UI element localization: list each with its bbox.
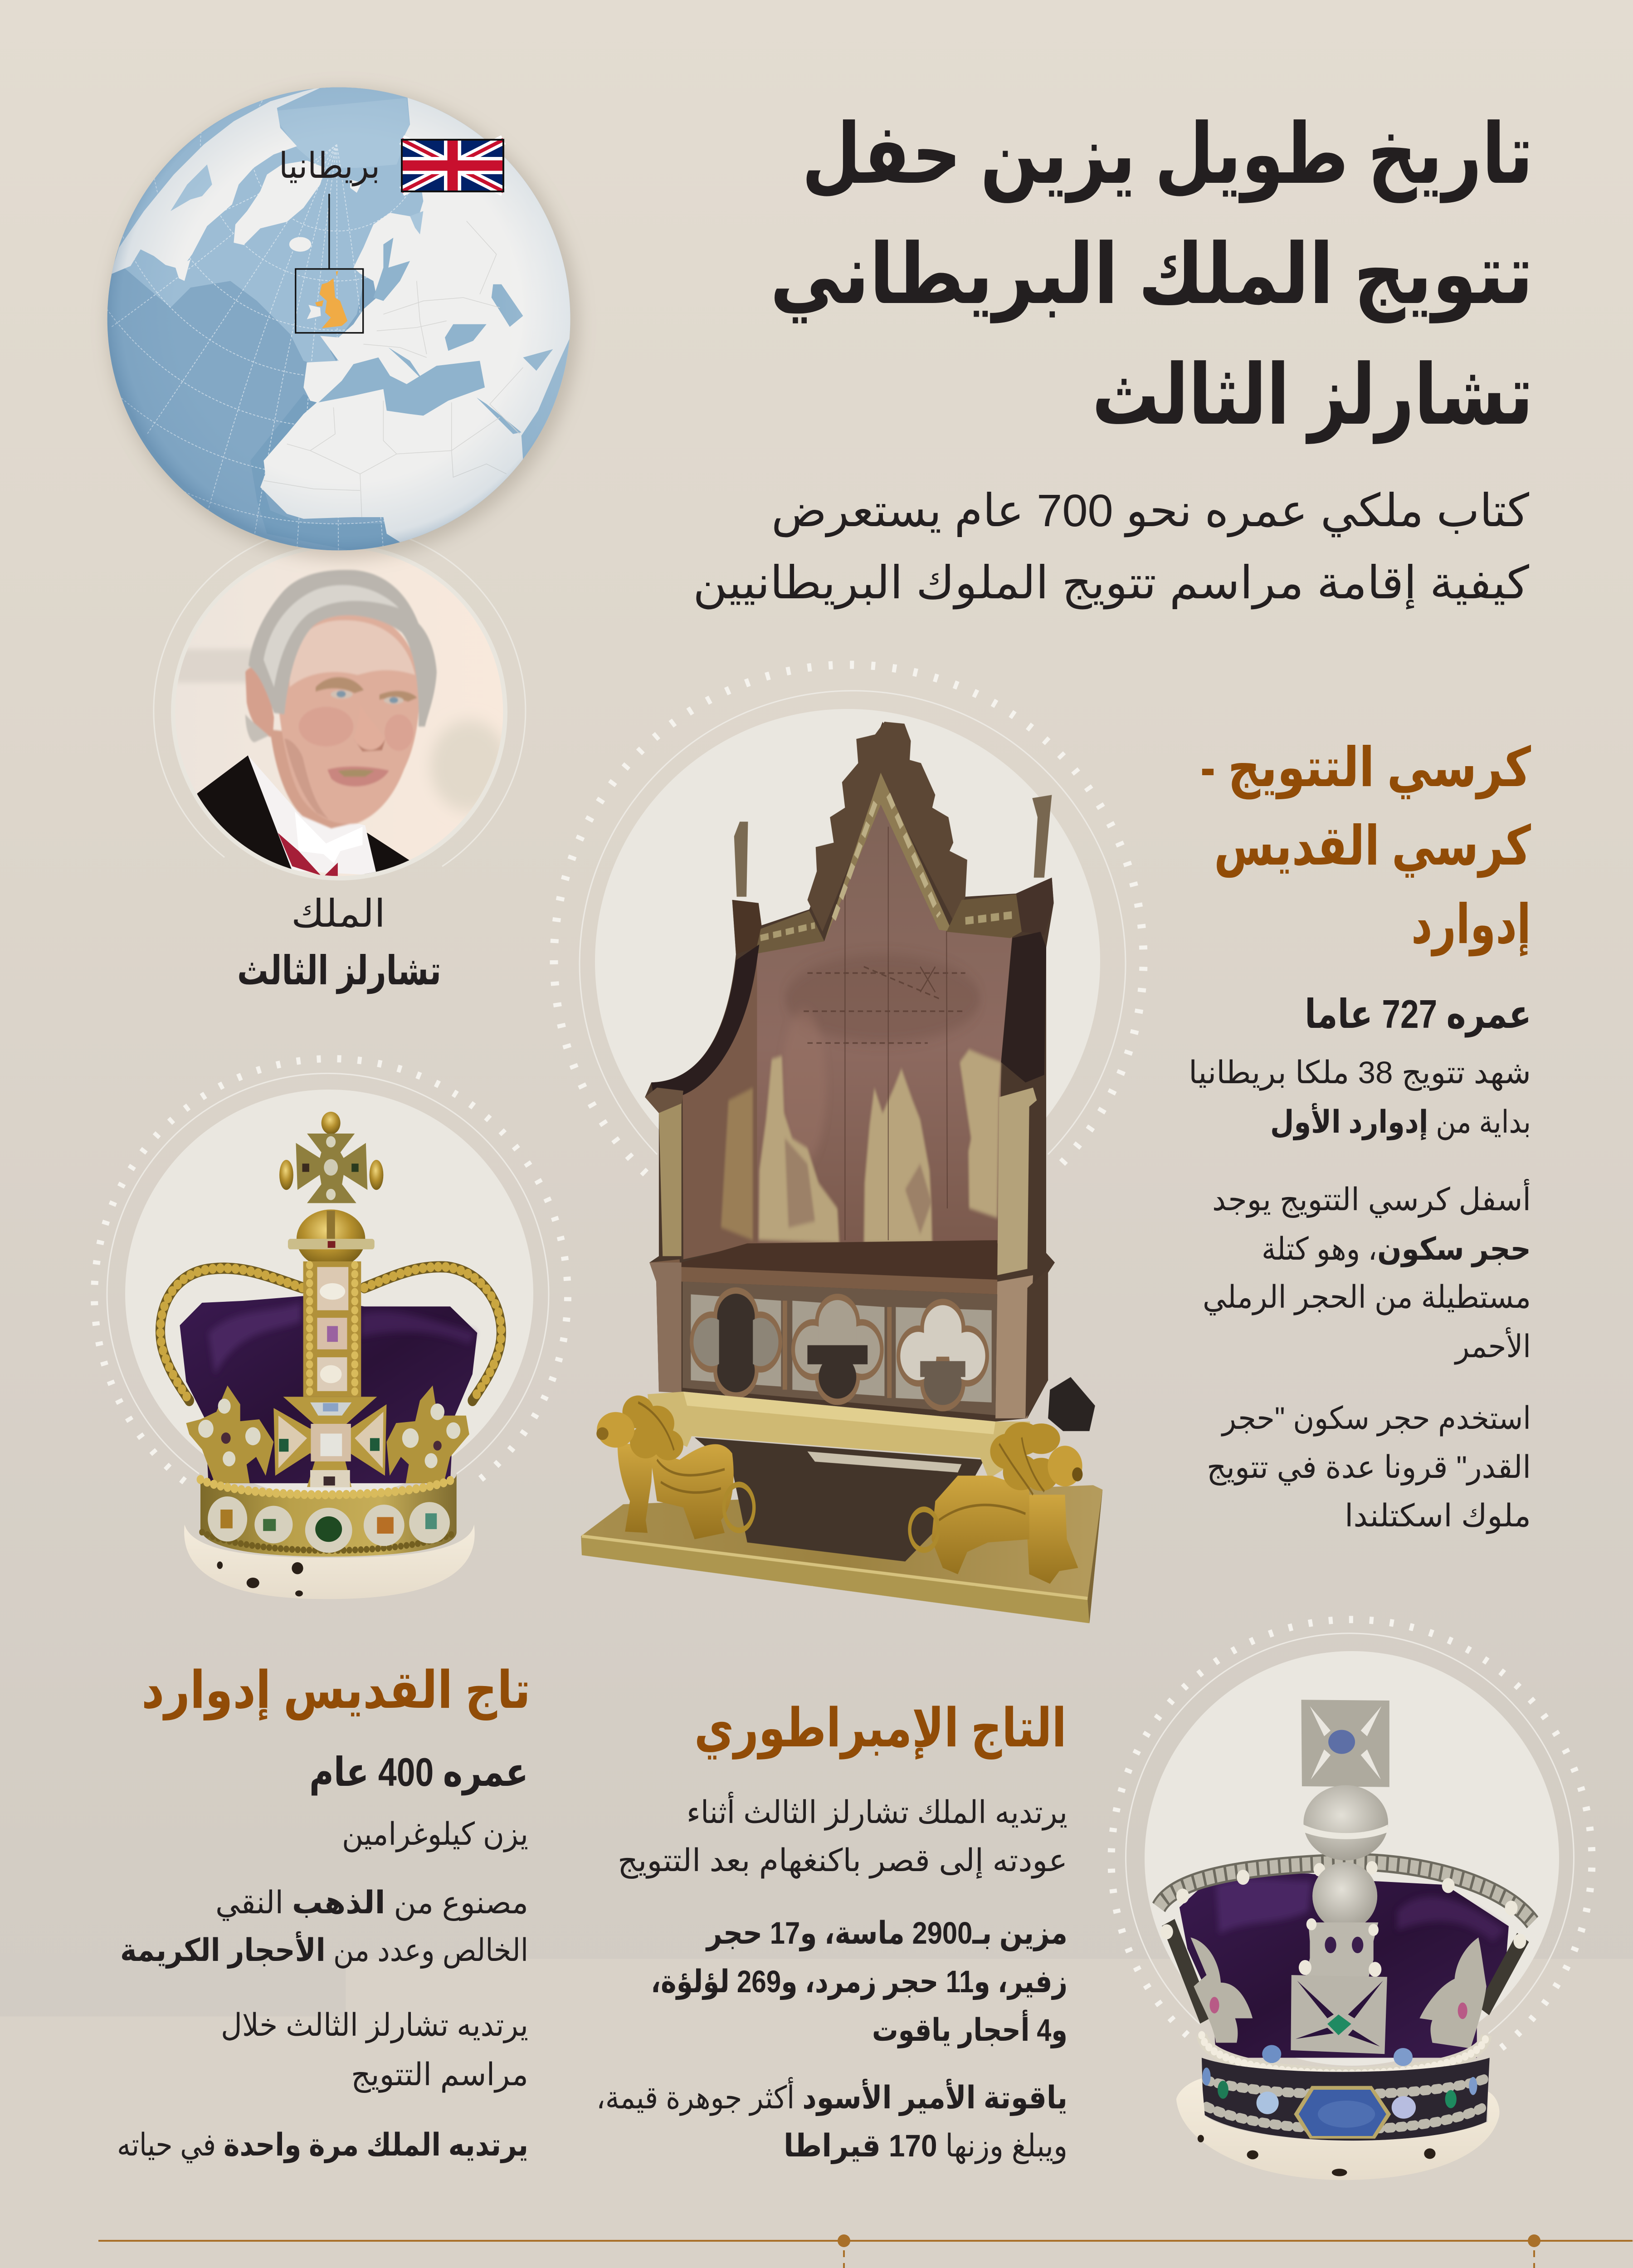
ermine — [1176, 2078, 1500, 2180]
velvet cap — [1180, 1873, 1509, 2058]
locator box and leader — [296, 194, 363, 333]
title — [770, 107, 1533, 444]
heading and text: Imperial State Crown: ويبلغ وزنها 170 قيراطا — [784, 2128, 1068, 2164]
gems — [208, 1496, 450, 1553]
front arch — [1312, 1862, 1377, 1930]
quatrefoils — [693, 1294, 985, 1405]
chair silhouette underlay — [645, 722, 1055, 1422]
heading and text: Coronation Chair: ملوك اسكتلندا — [1345, 1498, 1531, 1534]
photo: King Charles III portrait — [154, 525, 526, 885]
plinth top and front — [581, 1485, 1102, 1623]
heading and text: St Edward's Crown: عمره 400 عام — [309, 1750, 528, 1796]
lion left — [618, 1444, 734, 1539]
heading and text: St Edward's Crown: مراسم التتويج — [351, 2057, 528, 2093]
heading and text: Imperial State Crown: ياقوتة الأمير الأسود أكثر جوهرة قيمة، — [596, 2077, 1068, 2116]
velvet cap — [180, 1296, 477, 1483]
subtitle: كيفية إقامة مراسم تتويج الملوك البريطانيين — [693, 557, 1529, 610]
heading and text: Coronation Chair: القدر" قرونا عدة في تتويج — [1207, 1450, 1531, 1486]
heading and text: St Edward's Crown: الخالص وعدد من الأحجار الكريمة — [120, 1931, 528, 1969]
heading and text: St Edward's Crown: مصنوع من الذهب النقي — [215, 1885, 528, 1921]
ring: Imperial State Crown backdrop — [1111, 1619, 1592, 2066]
heading and text: Coronation Chair: شهد تتويج 38 ملكا بريطانيا — [1189, 1055, 1531, 1091]
photo: Imperial State Crown — [1159, 1700, 1532, 2180]
heading and text: St Edward's Crown: يرتديه تشارلز الثالث خلال — [221, 2008, 528, 2043]
tracery panel — [682, 1281, 997, 1415]
armrest wings — [651, 944, 759, 1095]
chair back panel — [755, 801, 1012, 1243]
title: تشارلز الثالث — [1092, 348, 1533, 444]
heading and text: St Edward's Crown — [117, 1662, 531, 2163]
photo: St Edward's Crown — [160, 1112, 501, 1599]
divider with markers — [98, 2234, 1633, 2268]
gilded patches — [759, 1049, 1001, 1243]
ring: St Edward's Crown backdrop — [94, 1059, 568, 1498]
heading and text: Imperial State Crown: مزين بـ2900 ماسة، و17 حجر — [705, 1916, 1068, 1951]
plank lines and graffiti — [804, 827, 965, 1240]
seat — [682, 1240, 997, 1280]
gable crockets — [807, 722, 967, 932]
label: Britain: بريطانيا — [279, 146, 380, 187]
label: King name: الملك — [291, 892, 385, 935]
pinnacles — [734, 821, 748, 897]
circlet band — [200, 1474, 457, 1557]
heading and text: Imperial State Crown: و4 أحجار ياقوت — [872, 2009, 1068, 2048]
heading and text: Coronation Chair: كرسي التتويج - — [1200, 737, 1531, 799]
heading and text: Coronation Chair: أسفل كرسي التتويج يوجد — [1212, 1179, 1531, 1218]
globe locator map — [0, 0, 716, 590]
jewelled band — [1202, 2058, 1490, 2141]
heading and text: Coronation Chair: إدوارد — [1411, 894, 1531, 957]
heading and text: St Edward's Crown: يزن كيلوغرامين — [342, 1817, 528, 1853]
heading and text: Coronation Chair — [1189, 737, 1531, 1534]
front arch — [303, 1261, 361, 1397]
side arches — [160, 1267, 501, 1401]
front cross — [1291, 1975, 1387, 2054]
subtitle — [693, 485, 1529, 610]
photo: Coronation Chair — [581, 722, 1102, 1623]
UK highlighted — [315, 271, 347, 328]
heading and text: Imperial State Crown: عودته إلى قصر باكنغهام بعد التتويج — [618, 1843, 1068, 1879]
gold base bar — [648, 1392, 1030, 1479]
heading and text: Coronation Chair: حجر سكون، وهو كتلة — [1262, 1232, 1531, 1267]
cross on top — [1301, 1700, 1389, 1787]
left side panel — [682, 954, 757, 1259]
ermine — [184, 1525, 475, 1599]
gable band — [824, 772, 952, 941]
heading and text: Coronation Chair: استخدم حجر سكون "حجر — [1221, 1401, 1531, 1437]
top rail left and right — [753, 911, 824, 954]
subtitle: كتاب ملكي عمره نحو 700 عام يستعرض — [771, 485, 1529, 538]
black prince's ruby and sapphires — [1294, 2086, 1391, 2139]
fleurs-de-lis — [1190, 1937, 1253, 2043]
heading and text: Imperial State Crown: التاج الإمبراطوري — [694, 1698, 1067, 1760]
Ireland — [307, 305, 321, 319]
orb — [1303, 1785, 1388, 1860]
heading and text: Coronation Chair: عمره 727 عاما — [1305, 992, 1531, 1037]
orb — [297, 1209, 365, 1268]
ring: chair backdrop — [554, 665, 1143, 1214]
land masses — [112, 88, 570, 543]
heading and text: St Edward's Crown: يرتديه الملك مرة واحدة في حياته — [117, 2127, 528, 2163]
heading and text: Coronation Chair: كرسي القديس — [1214, 816, 1531, 878]
label: King name — [237, 892, 441, 994]
heading and text: St Edward's Crown: تاج القديس إدوارد — [141, 1662, 531, 1721]
heading and text: Imperial State Crown — [596, 1698, 1068, 2164]
icon: UK flag — [402, 140, 503, 191]
heading and text: Coronation Chair: بداية من إدوارد الأول — [1270, 1103, 1531, 1140]
lower posts — [649, 1262, 682, 1393]
title: تتويج الملك البريطاني — [770, 227, 1533, 323]
country borders — [263, 221, 523, 517]
heading and text: Coronation Chair: مستطيلة من الحجر الرملي — [1203, 1280, 1531, 1315]
heading and text: Imperial State Crown: زفير، و11 حجر زمرد، و269 لؤلؤة، — [651, 1964, 1068, 2000]
heading and text: Imperial State Crown: يرتديه الملك تشارلز الثالث أثناء — [687, 1792, 1068, 1831]
label: King name: تشارلز الثالث — [237, 948, 441, 994]
seas — [318, 238, 570, 459]
fleurs-de-lis — [186, 1385, 469, 1483]
lion right — [931, 1476, 1078, 1584]
dark ornament rear right — [1048, 1377, 1095, 1431]
side arch frames — [1159, 1862, 1532, 2020]
heading and text: Coronation Chair: الأحمر — [1454, 1327, 1531, 1365]
front cross pattee — [273, 1397, 386, 1487]
arm posts — [645, 1088, 683, 1113]
cross on top — [322, 1112, 341, 1134]
pearl band — [1202, 2035, 1487, 2073]
